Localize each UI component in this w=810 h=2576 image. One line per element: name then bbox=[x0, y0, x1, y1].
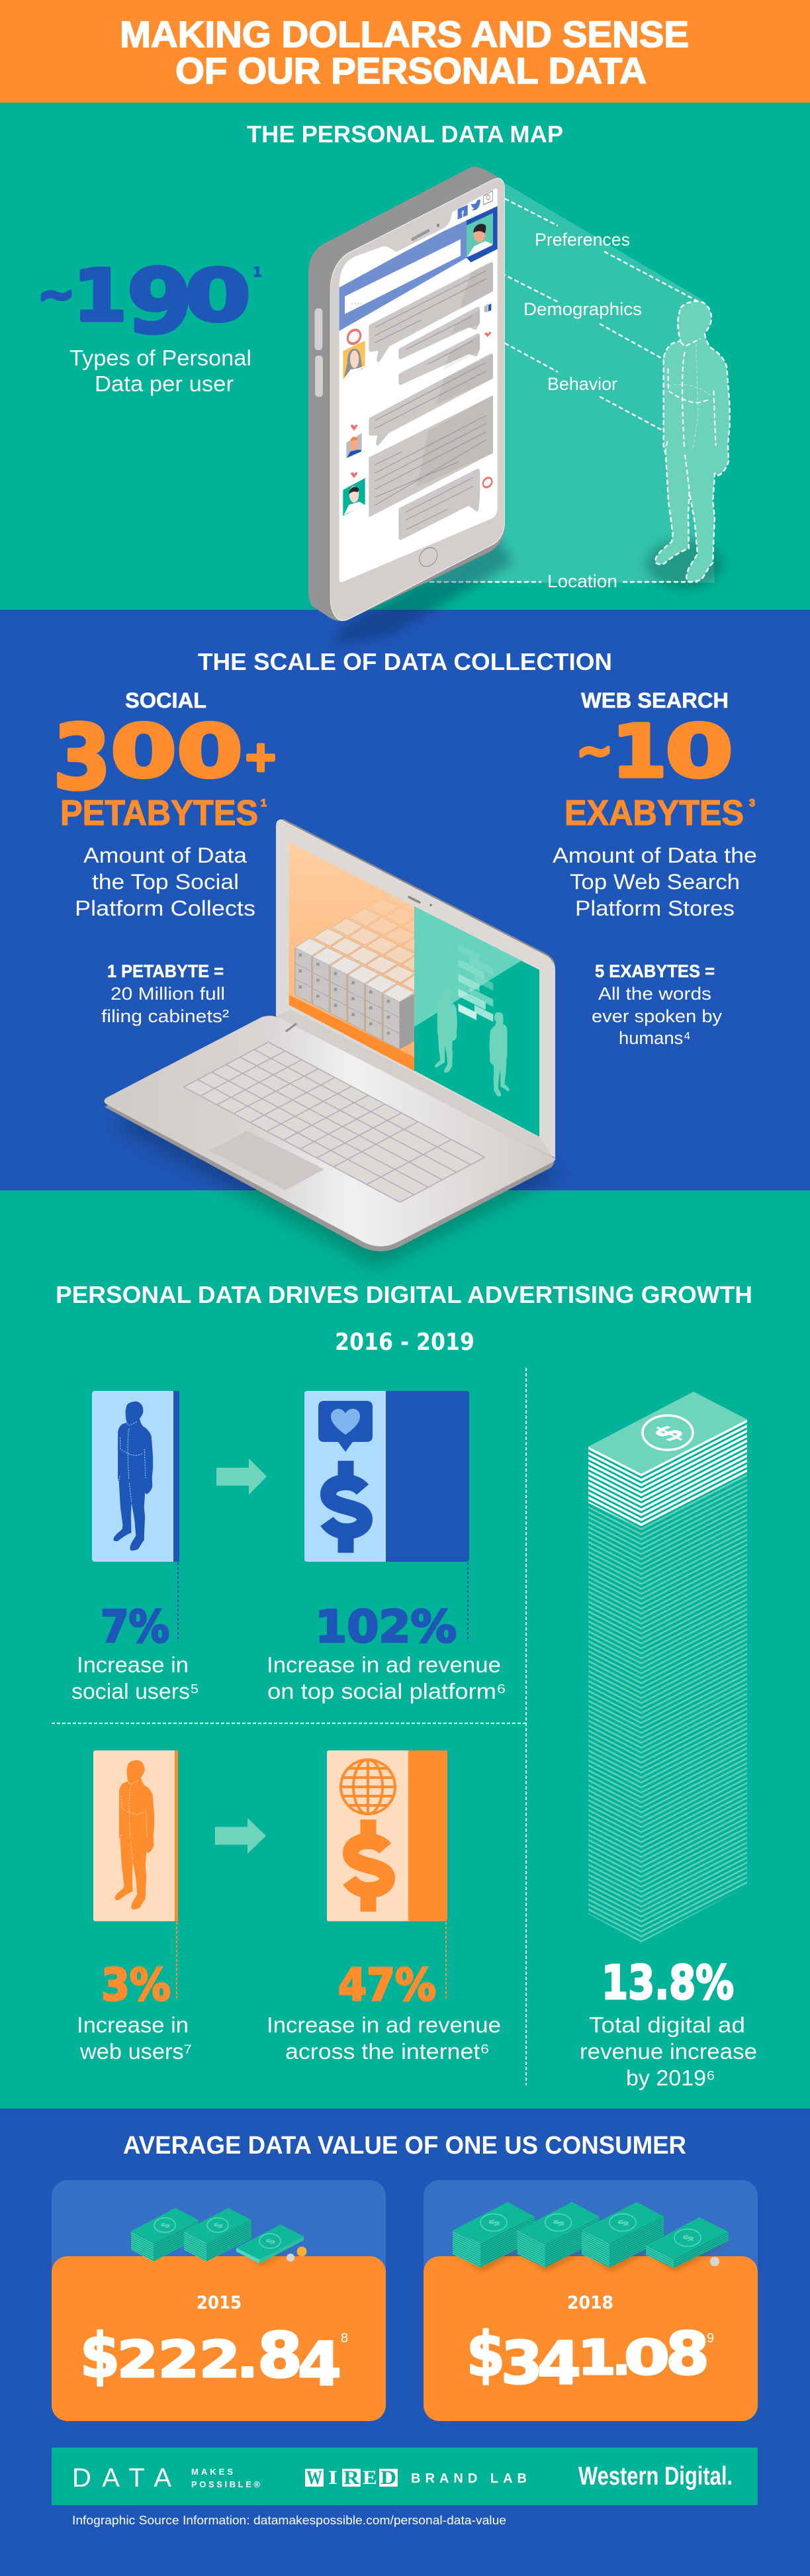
arrow: social users to ad revenue bbox=[216, 1458, 267, 1495]
logo: wired brand lab: W bbox=[306, 2467, 322, 2489]
facebook style header bbox=[339, 206, 498, 331]
value $341.08: $ bbox=[467, 2319, 505, 2390]
unit: exabytes: EXABYTES bbox=[564, 793, 744, 833]
text: increase in web users: web users⁷ bbox=[79, 2039, 192, 2064]
text: five exabytes equivalence: All the words bbox=[598, 984, 711, 1004]
value $222.84: 8 bbox=[257, 2320, 302, 2392]
chat bubbles bbox=[371, 265, 491, 538]
card: web ad revenue icon bbox=[327, 1750, 447, 1921]
value $341.08: 1 bbox=[578, 2330, 616, 2385]
money stacks 2018: $ bbox=[613, 2217, 634, 2228]
laptop screen: orange side with cabinets bbox=[289, 842, 414, 1071]
logo: western digital: Western Digital. bbox=[578, 2462, 733, 2491]
panel: average data value of one us consumer bbox=[0, 2109, 810, 2576]
value $341.08: 3 bbox=[501, 2329, 543, 2397]
stat: 3%: 3% bbox=[101, 1959, 171, 2011]
value $222.84: 8 bbox=[341, 2331, 348, 2346]
illustration: smartphone bbox=[308, 167, 505, 621]
illustration: outlined person bbox=[655, 301, 730, 582]
stat: 300+: 0 bbox=[177, 709, 243, 794]
card: social ad revenue icon bbox=[304, 1391, 469, 1562]
phone screen bbox=[339, 188, 498, 583]
value $222.84: $ bbox=[80, 2320, 120, 2391]
logo: wired brand lab: I bbox=[328, 2467, 338, 2489]
stat: ~190 types: ~ bbox=[38, 270, 75, 320]
text: increase in ad revenue across the internet: Increase in ad revenue bbox=[267, 2013, 501, 2037]
social icons: f bbox=[461, 209, 465, 220]
chart: stack of money bbox=[588, 1392, 747, 1942]
value $341.08: . bbox=[612, 2330, 631, 2385]
text: five exabytes equivalence bbox=[592, 961, 723, 1048]
money stacks 2015: $ bbox=[156, 2220, 174, 2230]
text: increase in web users: Increase in bbox=[77, 2013, 189, 2037]
text: five exabytes equivalence: ever spoken by bbox=[592, 1006, 723, 1026]
money stacks 2015: $ bbox=[209, 2220, 227, 2230]
text: increase in social users: social users⁵ bbox=[71, 1679, 199, 1703]
text: amount of data web search: Platform Stores bbox=[575, 896, 735, 920]
value $341.08: 4 bbox=[537, 2329, 581, 2397]
value $341.08: 8 bbox=[666, 2320, 709, 2388]
card: 2015 value bbox=[52, 2180, 386, 2421]
money stacks 2018: $ bbox=[549, 2217, 569, 2228]
text: amount of data social: Amount of Data bbox=[83, 843, 247, 867]
laptop keyboard bbox=[184, 1042, 484, 1202]
text: increase in ad revenue on top social platform bbox=[267, 1652, 506, 1703]
sponsor band bbox=[52, 2448, 758, 2505]
label: social: SOCIAL bbox=[125, 689, 206, 712]
text: increase in ad revenue across the internet bbox=[267, 2013, 501, 2064]
avatars and reactions bbox=[343, 304, 493, 516]
title: OF OUR PERSONAL DATA bbox=[175, 50, 647, 91]
subheading: years: 2016 - 2019 bbox=[335, 1329, 474, 1356]
text: increase in web users bbox=[77, 2013, 192, 2064]
stat: 102%: 102% bbox=[315, 1601, 457, 1652]
stat: ~190 types: 0 bbox=[185, 255, 251, 338]
illustration: laptop bbox=[105, 820, 562, 1268]
text: one petabyte equivalence: 1 PETABYTE = bbox=[107, 961, 224, 981]
heading: the scale of data collection: THE SCALE OF DATA COLLECTION bbox=[198, 648, 612, 675]
text: amount of data social: the Top Social bbox=[92, 870, 239, 894]
label: web search: WEB SEARCH bbox=[581, 689, 729, 712]
label: location: Location bbox=[547, 571, 617, 591]
value $222.84: 4 bbox=[298, 2330, 341, 2399]
year 2018: 2018 bbox=[567, 2293, 613, 2313]
stat: 47%: 47% bbox=[338, 1959, 436, 2011]
stat: 13.8%: 13.8% bbox=[602, 1956, 734, 2010]
text: amount of data web search: Top Web Search bbox=[570, 870, 740, 894]
money stacks 2015 bbox=[131, 2208, 307, 2267]
text: amount of data social bbox=[75, 843, 255, 920]
logo: wired brand lab: E bbox=[363, 2467, 377, 2489]
text: total digital ad revenue increase: revenue increase bbox=[580, 2039, 757, 2064]
title bbox=[120, 13, 689, 91]
label: demographics: Demographics bbox=[523, 299, 642, 319]
stat: ~190 types: 9 bbox=[126, 250, 193, 354]
arrow: web users to ad revenue bbox=[215, 1818, 266, 1854]
unit: exabytes: 3 bbox=[749, 798, 755, 809]
text: types of personal data per user: Types of Personal bbox=[69, 346, 251, 370]
text: one petabyte equivalence bbox=[101, 961, 229, 1026]
panel: personal data map bbox=[0, 103, 810, 645]
logo: wired brand lab: BRAND LAB bbox=[411, 2471, 527, 2486]
text: increase in ad revenue on top social platform: Increase in ad revenue bbox=[267, 1652, 501, 1677]
text: total digital ad revenue increase: by 2019⁶ bbox=[626, 2066, 715, 2090]
source line: Infographic Source Information: datamakespossible.com/personal-data-value bbox=[72, 2514, 506, 2527]
text: one petabyte equivalence: filing cabinets² bbox=[101, 1006, 229, 1026]
card: web users icon bbox=[93, 1750, 178, 1921]
money stacks 2018 bbox=[453, 2202, 729, 2272]
unit: petabytes: PETABYTES bbox=[60, 793, 258, 833]
panel: digital advertising growth bbox=[0, 1190, 810, 2109]
text: amount of data web search: Amount of Data the bbox=[553, 843, 757, 867]
stat: ~190 types: 1 bbox=[253, 264, 262, 280]
stat: ~10: ~ bbox=[576, 725, 613, 776]
text: increase in ad revenue across the internet: across the internet⁶ bbox=[285, 2039, 490, 2064]
text: types of personal data per user bbox=[69, 346, 251, 396]
label: behavior: Behavior bbox=[547, 374, 617, 394]
value $222.84: . bbox=[237, 2330, 258, 2389]
text: amount of data web search bbox=[553, 843, 757, 920]
stat: ~10: 1 bbox=[611, 709, 667, 794]
shadow: phone bbox=[331, 536, 513, 645]
logo: wired brand lab bbox=[305, 2467, 527, 2489]
value $222.84: 222 bbox=[117, 2330, 240, 2389]
logo: data makes possible: POSSIBLE® bbox=[191, 2479, 260, 2489]
laptop screen: green side with people bbox=[414, 906, 539, 1137]
chart: stack of money: $ bbox=[643, 1420, 694, 1446]
laptop base bbox=[105, 1010, 555, 1251]
text: total digital ad revenue increase: Total digital ad bbox=[589, 2013, 745, 2037]
logo: data makes possible bbox=[72, 2463, 260, 2493]
stat: 300+: 0 bbox=[111, 709, 177, 794]
heading: the personal data map: THE PERSONAL DATA MAP bbox=[247, 120, 563, 148]
social icons bbox=[458, 191, 492, 220]
text: types of personal data per user: Data per user bbox=[95, 371, 234, 396]
text: one petabyte equivalence: 20 Million full bbox=[111, 984, 225, 1004]
card: social users icon bbox=[92, 1391, 179, 1562]
money stacks 2018: $ bbox=[678, 2232, 699, 2244]
text: increase in ad revenue on top social platform: on top social platform⁶ bbox=[267, 1679, 506, 1703]
text: increase in social users: Increase in bbox=[77, 1652, 189, 1677]
panel: scale of data collection bbox=[57, 653, 756, 1272]
value $341.08: 9 bbox=[707, 2331, 714, 2346]
heading: personal data drives digital advertising growth: PERSONAL DATA DRIVES DIGITAL ADVERTISING GROWTH bbox=[56, 1281, 752, 1308]
card: 2018 value bbox=[424, 2180, 758, 2421]
logo: data makes possible: MAKES bbox=[191, 2467, 233, 2477]
header banner bbox=[0, 0, 810, 103]
heading: average data value: AVERAGE DATA VALUE OF ONE US CONSUMER bbox=[123, 2132, 686, 2160]
text: amount of data social: Platform Collects bbox=[75, 896, 255, 920]
laptop trackpad bbox=[209, 1131, 324, 1190]
text: increase in social users bbox=[71, 1652, 199, 1703]
text: five exabytes equivalence: 5 EXABYTES = bbox=[595, 961, 715, 981]
stat: ~10: 0 bbox=[665, 709, 733, 794]
logo: data makes possible: DATA bbox=[72, 2463, 171, 2493]
stat: 7%: 7% bbox=[101, 1601, 169, 1652]
text: five exabytes equivalence: humans⁴ bbox=[619, 1028, 691, 1048]
year 2015: 2015 bbox=[197, 2293, 242, 2313]
money stacks 2015: $ bbox=[261, 2236, 279, 2246]
title: MAKING DOLLARS AND SENSE bbox=[120, 13, 689, 55]
stat: ~190 types: 1 bbox=[73, 255, 127, 338]
data projection beam bbox=[410, 182, 715, 583]
unit: petabytes: 1 bbox=[261, 798, 267, 809]
dashed connectors bbox=[357, 195, 700, 582]
logo: wired brand lab: R bbox=[343, 2467, 359, 2489]
stat: 300+: 3 bbox=[53, 706, 111, 810]
text: total digital ad revenue increase bbox=[580, 2013, 757, 2090]
logo: wired brand lab: D bbox=[381, 2467, 396, 2489]
label: preferences: Preferences bbox=[535, 230, 630, 250]
shadow: person feet bbox=[647, 539, 723, 589]
stat: 300+: + bbox=[244, 732, 278, 781]
value $341.08: 0 bbox=[624, 2330, 670, 2385]
money stacks 2018: $ bbox=[484, 2217, 505, 2228]
